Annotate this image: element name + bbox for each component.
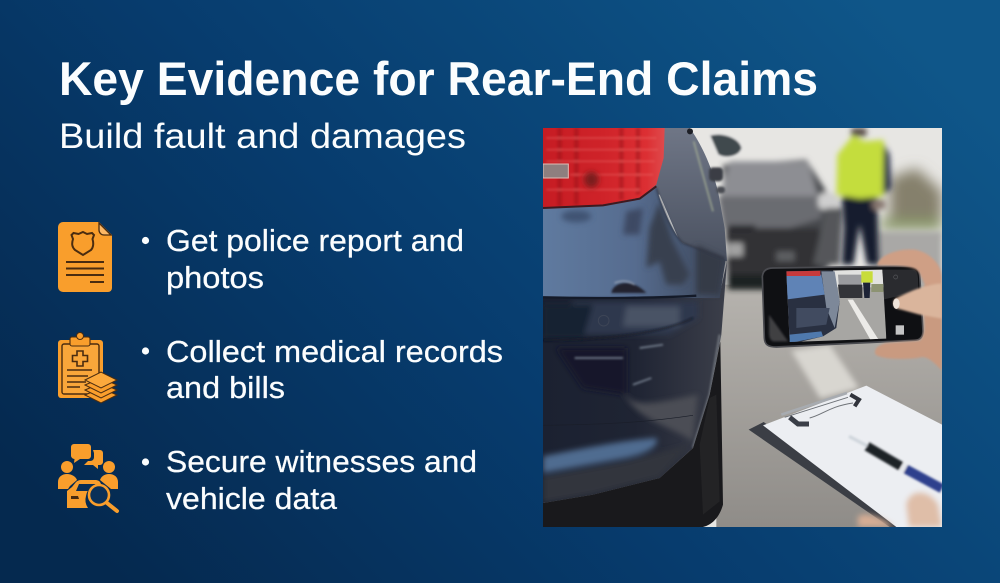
item text: photos [166, 260, 264, 295]
item text: and bills [166, 370, 285, 405]
item text: Collect medical records [166, 334, 503, 369]
tail light [543, 128, 665, 208]
fingers under clipboard [858, 493, 942, 527]
icon: police report document [58, 222, 112, 292]
lane marking [791, 345, 859, 399]
evidence item: witnesses and vehicle data [58, 444, 477, 516]
clipboard clamp [781, 393, 859, 424]
item text: Get police report and [166, 223, 464, 258]
title: Key Evidence for Rear-End Claims [59, 52, 818, 105]
item text: vehicle data [166, 481, 338, 516]
dent shading and scrapes [543, 201, 725, 503]
phone camera [894, 275, 898, 279]
road [716, 285, 942, 527]
phone screen with mini scene [786, 270, 886, 342]
bullet [142, 237, 149, 244]
icon: witnesses, speech bubbles, car and magnifier [58, 444, 118, 511]
bullet [142, 347, 149, 355]
roadside trees and grass [880, 168, 942, 231]
main car quarter panel [643, 128, 727, 261]
wing mirror and door details [710, 134, 742, 157]
officer in hi-vis vest [836, 128, 891, 265]
icon: medical clipboard and bills [58, 332, 117, 403]
evidence item: medical records [58, 332, 503, 405]
clipboard board [749, 422, 910, 527]
wheel and shadow [543, 341, 723, 527]
bullet [142, 458, 149, 466]
background car [718, 160, 843, 290]
item text: Secure witnesses and [166, 444, 477, 479]
photo: damaged car with phone and clipboard [543, 128, 942, 527]
hand holding phone [875, 249, 942, 371]
pen [849, 436, 942, 489]
clipboard paper [763, 386, 942, 527]
main car lower body [543, 261, 727, 503]
smartphone [762, 266, 923, 347]
bumper crease and scratches [543, 141, 725, 448]
main car upper bumper [543, 186, 726, 298]
subtitle: Build fault and damages [59, 117, 466, 156]
phone QR mark [896, 325, 904, 335]
evidence item: police report [58, 222, 464, 295]
